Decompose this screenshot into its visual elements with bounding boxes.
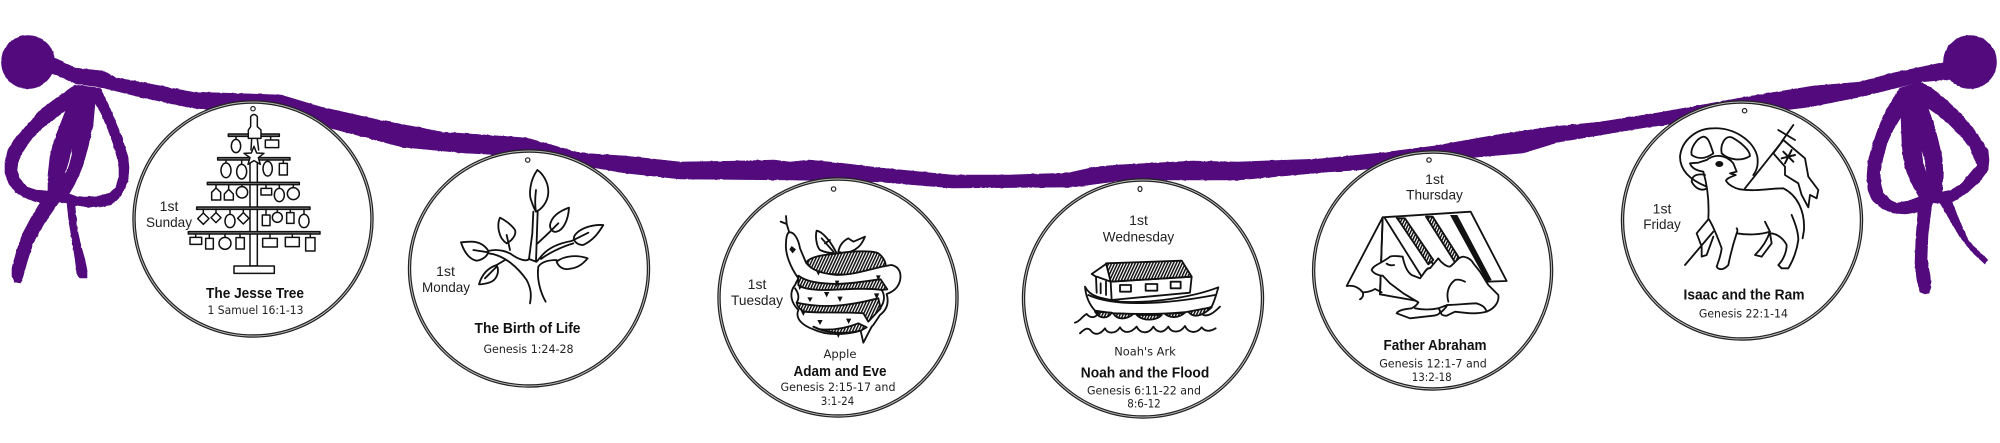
label: day: Wednesday <box>1103 228 1174 244</box>
reference: scripture: Genesis 2:15-17 and <box>780 380 896 394</box>
ornament: Isaac and the Ram <box>1622 102 1862 339</box>
reference: scripture: 13:2-18 <box>1412 370 1452 384</box>
heading: The Birth of Life: The Birth of Life <box>474 321 580 337</box>
ornament: Noah and the Flood <box>1024 180 1262 417</box>
label: day: 1st <box>160 198 178 214</box>
caption: Noah's Ark: Noah's Ark <box>1114 344 1176 358</box>
icon: sapling <box>461 170 603 303</box>
heading: The Jesse Tree: The Jesse Tree <box>206 286 304 302</box>
icon: lamb with banner <box>1680 125 1818 269</box>
left bow <box>2 36 129 283</box>
label: day: Monday <box>422 279 470 295</box>
ornament: The Birth of Life <box>410 151 648 386</box>
label: day: 1st <box>748 276 766 292</box>
label: day: Tuesday <box>731 292 783 308</box>
label: day: 1st <box>1425 171 1444 187</box>
label: day: Friday <box>1643 216 1681 232</box>
caption: Apple: Apple <box>824 347 856 361</box>
label: day: 1st <box>436 263 455 279</box>
reference: scripture: 8:6-12 <box>1127 396 1161 410</box>
heading: Isaac and the Ram: Isaac and the Ram <box>1684 288 1804 304</box>
reference: scripture: Genesis 6:11-22 and <box>1087 384 1201 398</box>
right bow <box>1867 36 1996 294</box>
reference: scripture: Genesis 12:1-7 and <box>1379 356 1487 370</box>
label: day: Sunday <box>146 214 192 230</box>
label: day: 1st <box>1129 212 1148 228</box>
heading: Noah and the Flood: Noah and the Flood <box>1081 366 1209 382</box>
icon: tent and camel <box>1347 212 1507 318</box>
icon: apple and serpent <box>781 216 900 343</box>
ornament: Father Abraham <box>1314 152 1552 389</box>
reference: scripture: Genesis 22:1-14 <box>1699 306 1788 320</box>
label: day: 1st <box>1653 200 1671 216</box>
heading: Adam and Eve: Adam and Eve <box>794 364 886 380</box>
icon: Jesse tree <box>188 114 320 273</box>
reference: scripture: 3:1-24 <box>821 394 854 408</box>
heading: Father Abraham: Father Abraham <box>1384 338 1486 354</box>
garland rope <box>45 55 1955 188</box>
ornament: The Jesse Tree <box>134 102 372 336</box>
reference: scripture: 1 Samuel 16:1-13 <box>208 303 304 317</box>
ornament: Adam and Eve <box>719 179 957 416</box>
reference: scripture: Genesis 1:24-28 <box>484 342 574 356</box>
label: day: Thursday <box>1406 187 1463 203</box>
icon: Noah's ark <box>1075 261 1220 334</box>
